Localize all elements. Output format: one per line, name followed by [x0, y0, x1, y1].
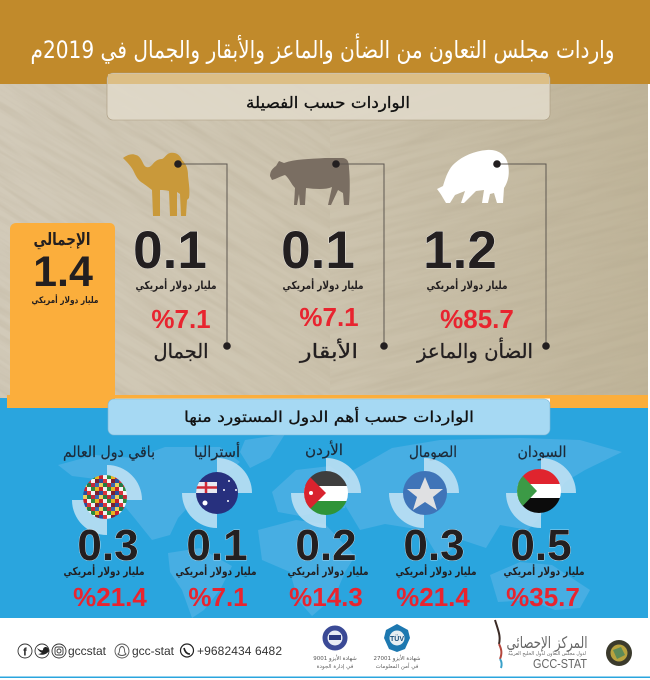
quarter rings — [182, 458, 252, 528]
heading bar: imports by source country — [108, 399, 550, 435]
social handles — [18, 644, 282, 658]
value: 1.2 — [423, 221, 497, 280]
quarter rings — [291, 458, 361, 528]
phone number: +9682434 6482 — [197, 644, 282, 658]
share: %7.1 — [299, 302, 359, 332]
icon: cow — [270, 158, 350, 205]
share: %7.1 — [188, 582, 248, 612]
certificate: TUV ISO 27001: شهادة الأيزو 27001 — [373, 654, 421, 662]
certificate: ISO 9001 — [313, 628, 357, 670]
fur background panel — [0, 84, 648, 398]
name: الجمال — [154, 339, 208, 363]
icon: flag of Sudan — [517, 469, 561, 513]
world map — [58, 434, 622, 618]
value: 0.1 — [133, 221, 207, 280]
GCC-STAT logo — [495, 620, 588, 671]
label: الأردن — [305, 440, 343, 459]
connector: sheep — [497, 164, 546, 346]
heading bar: imports by source country: الواردات حسب أهم الدول المستورد منها — [184, 407, 474, 426]
country: Sudan — [504, 443, 584, 612]
heading bar: imports by family — [107, 73, 550, 120]
name: الضأن والماعز — [416, 337, 533, 363]
label: السودان — [518, 443, 566, 461]
value: 0.1 — [186, 521, 248, 570]
quarter rings — [72, 465, 142, 535]
certificate: TUV ISO 27001: في أمن المعلومات — [376, 662, 419, 670]
GCC-STAT logo: المركز الإحصائي — [506, 633, 588, 653]
share: %7.1 — [151, 304, 211, 334]
handle: gcc-stat — [132, 644, 175, 658]
GCC-STAT logo: لدول مجلس التعاون لدول الخليج العربية — [508, 651, 586, 657]
icon: facebook: f — [23, 646, 27, 658]
handle: gccstat — [68, 644, 107, 658]
footer — [0, 618, 650, 680]
icon: facebook — [18, 644, 32, 658]
icon: flag of Australia — [195, 471, 239, 515]
icon: snapchat — [115, 644, 129, 658]
GCC-STAT logo: GCC-STAT — [533, 656, 587, 671]
share: %35.7 — [506, 582, 580, 612]
label: الصومال — [409, 443, 457, 461]
unit: مليار دولار أمريكي — [426, 278, 508, 292]
share: %21.4 — [396, 582, 470, 612]
icon: instagram — [52, 644, 66, 658]
category: cattle — [270, 158, 388, 363]
total panel: مليار دولار أمريكي — [32, 294, 98, 306]
certificate: TUV ISO 27001: TÜV — [390, 634, 404, 643]
icon: flags globe — [83, 475, 127, 519]
icon: sheep — [437, 150, 509, 203]
label: باقي دول العالم — [63, 443, 155, 462]
country: rest of world — [63, 443, 155, 612]
unit: مليار دولار أمريكي — [282, 278, 364, 292]
value: 0.1 — [281, 221, 355, 280]
connector: cattle — [336, 164, 384, 346]
icon: twitter — [35, 644, 49, 658]
icon: camel — [123, 153, 189, 216]
total panel — [7, 223, 115, 408]
certificate: TUV ISO 27001 — [373, 624, 421, 670]
certificate: ISO 9001: شهادة الأيزو 9001 — [313, 654, 357, 662]
unit: مليار دولار أمريكي — [136, 278, 216, 292]
icon: flag of Somalia — [403, 471, 447, 515]
total panel: الإجمالي — [34, 230, 90, 250]
share: %14.3 — [289, 582, 363, 612]
header band — [0, 0, 650, 84]
quarter rings — [389, 458, 459, 528]
share: %21.4 — [73, 582, 147, 612]
country: Australia — [176, 442, 256, 612]
unit: مليار دولار أمريكي — [288, 564, 368, 578]
country: Somalia — [389, 443, 476, 612]
country: Jordan — [288, 440, 368, 612]
value: 0.3 — [77, 521, 139, 570]
value: 0.5 — [510, 521, 572, 570]
name: الأبقار — [299, 339, 358, 363]
unit: مليار دولار أمريكي — [64, 564, 144, 578]
unit: مليار دولار أمريكي — [396, 564, 476, 578]
heading bar: imports by family: الواردات حسب الفصيلة — [246, 93, 410, 113]
orange strip under fur panel — [115, 395, 648, 408]
unit: مليار دولار أمريكي — [504, 564, 584, 578]
category: camels — [123, 153, 231, 363]
icon: whatsapp — [180, 644, 194, 657]
certificate: ISO 9001: في إدارة الجودة — [317, 664, 354, 670]
icon: flag of Jordan — [304, 471, 348, 516]
blue countries panel — [0, 398, 648, 618]
share: %85.7 — [440, 304, 514, 334]
unit: مليار دولار أمريكي — [176, 564, 256, 578]
value: 0.3 — [403, 521, 465, 570]
label: أستراليا — [194, 442, 240, 461]
category: sheep and goats — [416, 150, 550, 363]
value: 0.2 — [295, 521, 357, 570]
total panel: 1.4 — [33, 248, 93, 296]
connector: camels — [178, 164, 227, 346]
icon: GCC emblem — [606, 640, 632, 666]
quarter rings — [506, 458, 576, 528]
